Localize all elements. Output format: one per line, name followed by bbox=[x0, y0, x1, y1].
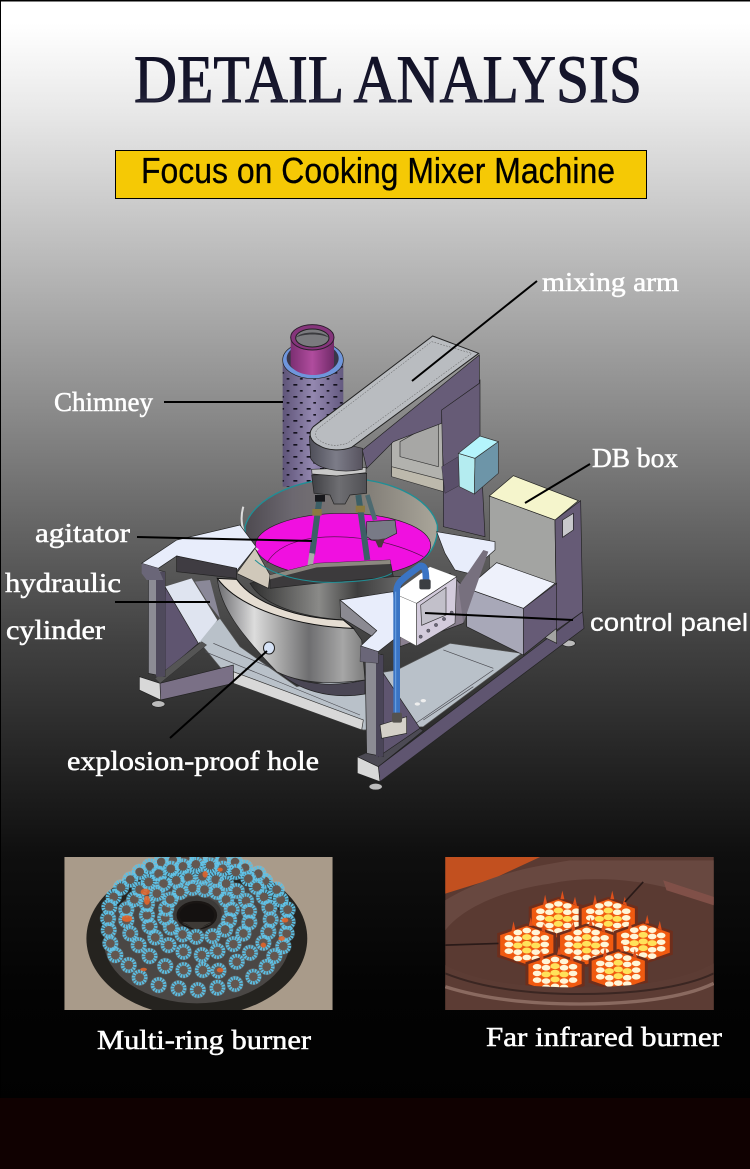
bottom maroon band bbox=[0, 1098, 750, 1169]
electrical tower and window bbox=[392, 380, 485, 537]
machine base frame bbox=[139, 568, 584, 790]
label: DB box: DB box bbox=[592, 443, 678, 473]
pot shell and burner housing bbox=[217, 573, 463, 696]
label: mixing arm: mixing arm bbox=[542, 267, 679, 297]
photo: far infrared burner bbox=[445, 857, 714, 1010]
label: control panel: control panel bbox=[590, 609, 748, 637]
DB box bbox=[489, 476, 583, 643]
label: Far infrared burner: Far infrared burner bbox=[486, 1022, 722, 1052]
explosion-proof hole bbox=[264, 642, 274, 654]
mixing arm bbox=[309, 336, 479, 504]
label: explosion-proof hole: explosion-proof hole bbox=[67, 746, 319, 776]
label: agitator: agitator bbox=[35, 518, 130, 548]
photo: multi-ring burner bbox=[64, 850, 333, 1017]
label: hydraulic: hydraulic bbox=[5, 568, 121, 598]
subtitle banner: Focus on Cooking Mixer Machine bbox=[141, 150, 615, 191]
chimney bbox=[283, 325, 343, 487]
machine illustration bbox=[115, 281, 590, 790]
title: DETAIL ANALYSIS bbox=[134, 41, 642, 117]
label: Multi-ring burner: Multi-ring burner bbox=[97, 1025, 311, 1055]
mixing pot interior bbox=[242, 478, 437, 577]
label: cylinder: cylinder bbox=[6, 615, 105, 645]
leader lines bbox=[115, 281, 590, 738]
scraper bracket and agitator shafts bbox=[310, 495, 397, 567]
junction box bbox=[458, 436, 498, 494]
front tables, cover, control unit and pipe bbox=[142, 525, 495, 723]
lower control box cabinet bbox=[467, 563, 557, 655]
label: Chimney: Chimney bbox=[54, 387, 153, 417]
